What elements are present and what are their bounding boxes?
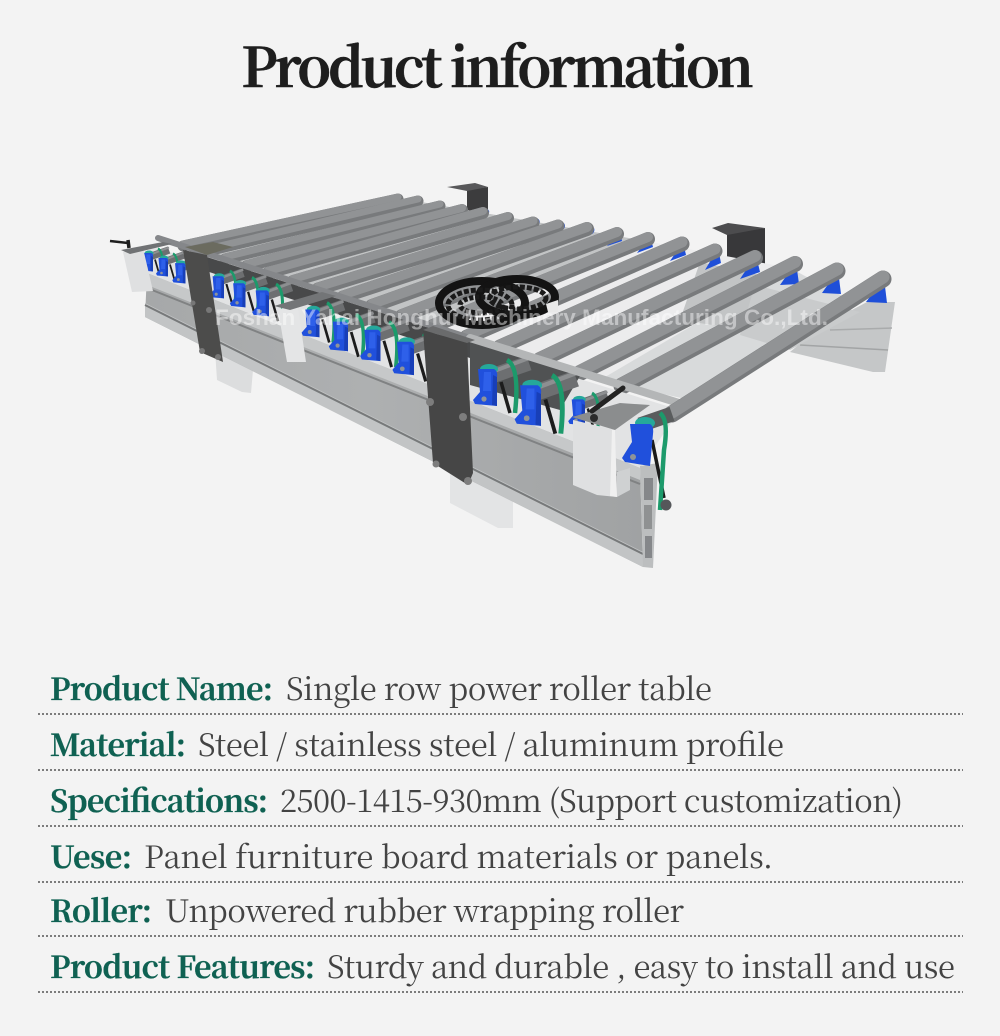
- front aluminium profile beam: [145, 273, 643, 567]
- spec row: material: Steel / stainless steel / aluminum profile: [198, 720, 784, 765]
- spec row: roller: [38, 886, 963, 936]
- spec row: material: Material:: [50, 721, 186, 765]
- spec row: uses: Uese:: [50, 833, 132, 877]
- title: Product information: [241, 24, 754, 103]
- spec row: material: [38, 720, 963, 770]
- spec row: roller: Roller:: [50, 887, 152, 931]
- shaded strip under cross bar: [185, 250, 470, 358]
- roller bed under-structure: [183, 198, 860, 400]
- far mounting bracket right: [712, 223, 765, 272]
- far end aluminium beam: [790, 302, 895, 372]
- steel plate left: [183, 242, 233, 362]
- spec row: product features: Sturdy and durable , easy to install and use: [327, 942, 955, 987]
- spec row: product name: Product Name:: [50, 665, 273, 709]
- spec row: specifications: 2500-1415-930mm (Support customization): [280, 776, 903, 821]
- blue bearings with pulleys and green belts: [141, 248, 607, 434]
- front cross bar: [158, 238, 682, 404]
- white bracket middle: [274, 292, 336, 362]
- white bracket right with handle: [572, 388, 650, 497]
- support foot centre: [450, 470, 513, 528]
- last roller over bar: [672, 277, 883, 414]
- belt compartment behind the front rail: [147, 246, 680, 468]
- far-end blue roller mounts: [397, 195, 887, 303]
- far mounting bracket left: [447, 183, 488, 212]
- spec row: roller: Unpowered rubber wrapping roller: [165, 886, 685, 931]
- spec row: product features: Product Features:: [50, 943, 315, 987]
- steel plate centre: [423, 326, 475, 485]
- support foot left: [215, 350, 253, 393]
- spec row: uses: [38, 832, 963, 882]
- end drive with green belt: [622, 413, 672, 510]
- spec row: specifications: Specifications:: [50, 777, 268, 821]
- spec row: product features: [38, 942, 963, 992]
- watermark: Foshan Yahai Honghui Machinery Manufacturing Co.,Ltd.: [215, 305, 828, 330]
- spec row: specifications: [38, 776, 963, 826]
- spec row: product name: [38, 664, 963, 714]
- spec row: product name: Single row power roller table: [286, 664, 712, 709]
- beam end profile: [640, 463, 658, 568]
- rollers: [183, 197, 837, 386]
- white bracket left: [110, 240, 172, 292]
- spec row: uses: Panel furniture board materials or panels.: [144, 832, 773, 877]
- coiled black cable: [439, 279, 558, 325]
- product photo: single row power roller table: [110, 183, 895, 568]
